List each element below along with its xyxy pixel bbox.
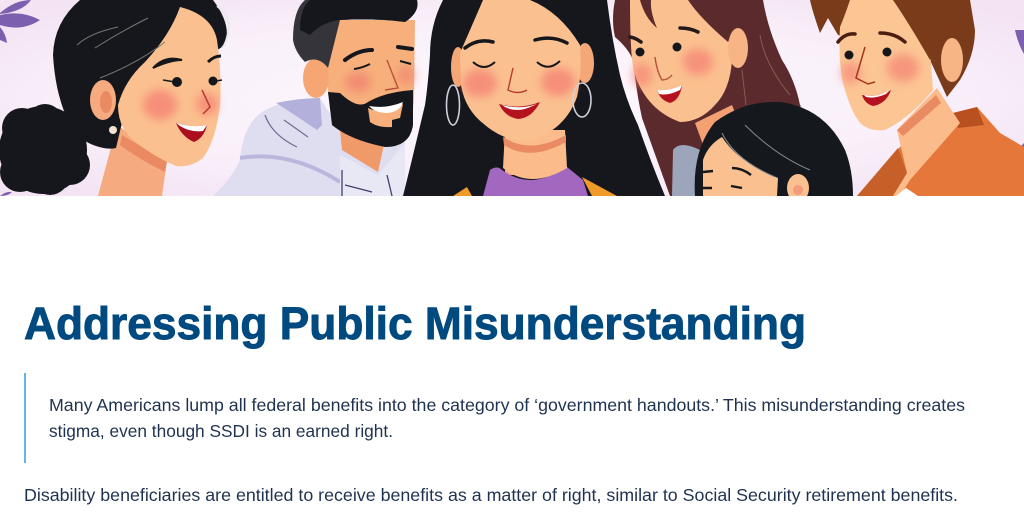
callout: quoted statement with blue rule [24,373,970,463]
person: woman with bun [0,0,229,196]
callout accent bar [24,373,26,463]
person: woman with brown hair [613,0,801,196]
icon: purple leaves right edge [1015,30,1024,147]
icon: purple leaves top left [0,0,40,196]
person: child with black hair [695,102,853,202]
callout text: stigma, even though SSDI is an earned right. [49,421,393,441]
title: Addressing Public Misunderstanding [24,298,806,349]
body paragraph: Disability beneficiaries are entitled to receive benefits as a matter of right, similar to Social Security retirement benefits. [24,485,958,505]
person: woman with long black hair, centre [403,0,665,196]
person: man with auburn hair and orange shirt [810,0,1024,196]
callout text: Many Americans lump all federal benefits into the category of ‘government handouts.’ This misunderstanding creates [49,395,965,415]
hero illustration: group of smiling people [0,0,1024,202]
person: bearded man in lavender hoodie [213,0,418,196]
